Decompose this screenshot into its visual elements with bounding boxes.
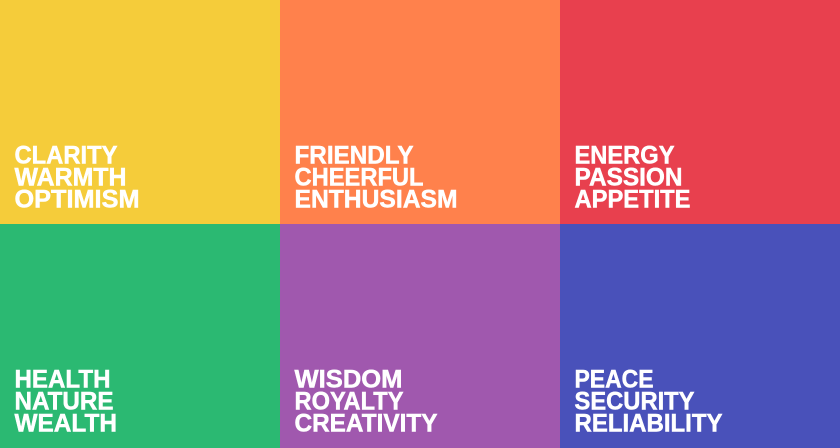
panel: orange: CHEERFUL <box>294 164 424 192</box>
panel: red: PASSION <box>574 164 682 192</box>
panel: yellow <box>0 0 280 224</box>
panel: orange: FRIENDLY <box>294 142 414 170</box>
panel: purple <box>280 224 560 448</box>
panel: blue <box>560 224 840 448</box>
panel: yellow: CLARITY <box>14 142 118 170</box>
panel: purple: WISDOM <box>294 366 402 394</box>
panel: green: WEALTH <box>14 410 117 438</box>
panel: purple: ROYALTY <box>294 388 404 416</box>
panel: green <box>0 224 280 448</box>
panel: blue: PEACE <box>574 366 654 394</box>
panel: green: NATURE <box>14 388 114 416</box>
panel: orange: ENTHUSIASM <box>294 186 458 214</box>
panel: green: HEALTH <box>14 366 110 394</box>
panel: blue: SECURITY <box>574 388 695 416</box>
panel: red: ENERGY <box>574 142 675 170</box>
panel: blue: RELIABILITY <box>574 410 723 438</box>
panel: orange <box>280 0 560 224</box>
panel: red <box>560 0 840 224</box>
panel: yellow: OPTIMISM <box>14 186 140 214</box>
panel: red: APPETITE <box>574 186 690 214</box>
panel: yellow: WARMTH <box>14 164 126 192</box>
panel: purple: CREATIVITY <box>294 410 438 438</box>
